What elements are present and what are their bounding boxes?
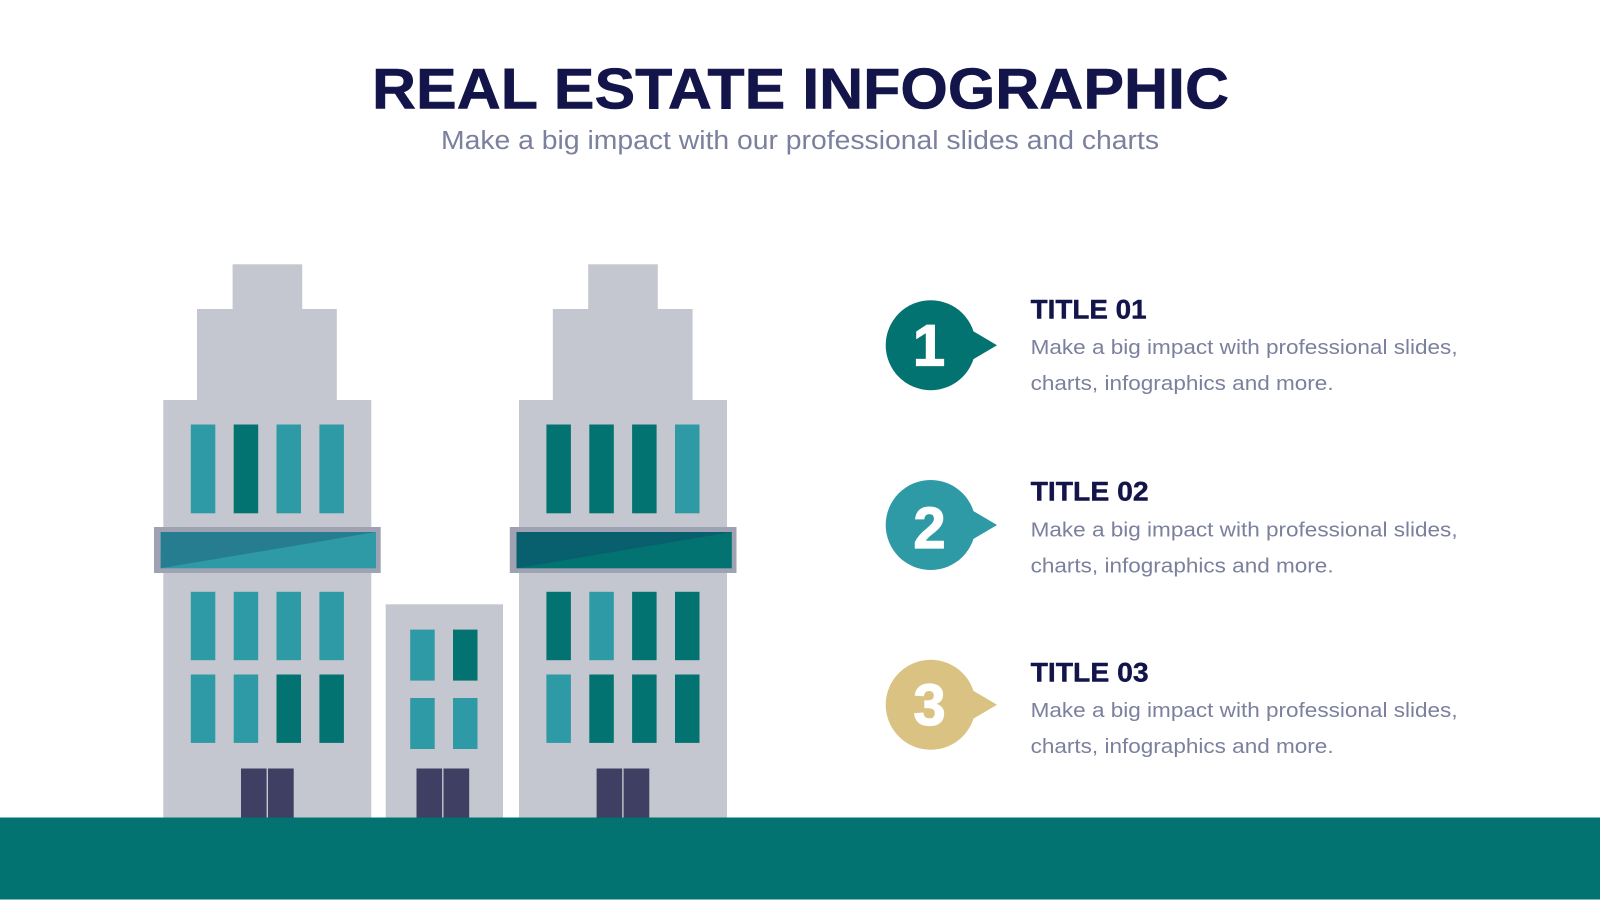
badge 3: 3 bbox=[913, 673, 946, 738]
badge 3 bbox=[886, 660, 997, 750]
door bbox=[241, 768, 294, 818]
badge 1: 1 bbox=[913, 314, 945, 379]
windows: top row bbox=[546, 424, 700, 513]
windows: lower row bbox=[546, 674, 700, 743]
door bbox=[597, 768, 649, 818]
description 3: charts, infographics and more. bbox=[1031, 735, 1334, 758]
ground band bbox=[0, 818, 1600, 900]
windows: middle row bbox=[191, 592, 344, 660]
item 2 bbox=[886, 477, 1458, 578]
windows: top row bbox=[191, 424, 344, 513]
item 3 bbox=[886, 658, 1458, 758]
description 1 bbox=[1031, 336, 1458, 395]
heading 3: TITLE 03 bbox=[1031, 658, 1149, 688]
glass band bbox=[154, 527, 381, 573]
heading 1: TITLE 01 bbox=[1031, 294, 1147, 324]
title: REAL ESTATE INFOGRAPHIC bbox=[372, 57, 1229, 121]
badge 1 bbox=[886, 300, 997, 390]
description 1: charts, infographics and more. bbox=[1031, 372, 1334, 395]
subtitle: Make a big impact with our professional slides and charts bbox=[441, 127, 1159, 155]
badge 2: 2 bbox=[913, 496, 946, 561]
description 2: charts, infographics and more. bbox=[1031, 554, 1334, 578]
building: small centre block bbox=[386, 604, 503, 818]
badge 2 bbox=[886, 480, 997, 570]
heading 2: TITLE 02 bbox=[1031, 477, 1149, 507]
description 2: Make a big impact with professional slides, bbox=[1031, 518, 1458, 542]
description 1: Make a big impact with professional slides, bbox=[1031, 336, 1458, 359]
building: left tower bbox=[154, 264, 381, 818]
building: right tower bbox=[510, 264, 736, 818]
glass band bbox=[510, 527, 736, 573]
windows: middle row bbox=[546, 592, 700, 660]
item 1 bbox=[886, 294, 1458, 395]
windows: lower row bbox=[191, 674, 344, 743]
door bbox=[416, 768, 469, 818]
description 2 bbox=[1031, 518, 1458, 578]
description 3: Make a big impact with professional slides, bbox=[1031, 699, 1458, 722]
description 3 bbox=[1031, 699, 1458, 758]
